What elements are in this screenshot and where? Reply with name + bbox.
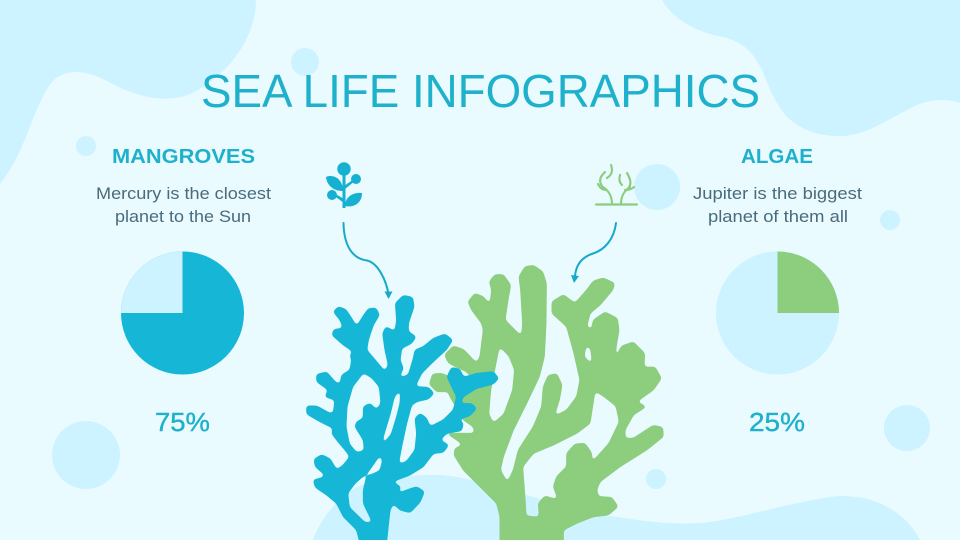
- panel: mangroves: [96, 146, 271, 437]
- icon: sprout: [326, 162, 362, 208]
- mangroves description: Mercury is the closest: [96, 184, 271, 203]
- mangroves description: [96, 184, 271, 226]
- title: SEA LIFE INFOGRAPHICS: [201, 65, 760, 117]
- arrow: algae icon to green coral: [571, 223, 616, 283]
- mangroves percentage: 75%: [155, 407, 210, 437]
- algae percentage: 25%: [749, 407, 805, 437]
- algae heading: ALGAE: [741, 146, 813, 168]
- green coral: [429, 265, 663, 540]
- algae description: [693, 184, 862, 226]
- algae description: Jupiter is the biggest: [693, 184, 862, 203]
- arrow: sprout to blue coral: [344, 223, 392, 299]
- pie chart: 75%: [121, 252, 244, 374]
- panel: algae: [693, 146, 862, 437]
- icon: algae: [596, 165, 637, 204]
- mangroves heading: MANGROVES: [112, 146, 255, 168]
- algae description: planet of them all: [708, 207, 848, 226]
- blue coral: [307, 295, 499, 540]
- pie chart: 25%: [716, 252, 839, 374]
- mangroves description: planet to the Sun: [115, 207, 251, 226]
